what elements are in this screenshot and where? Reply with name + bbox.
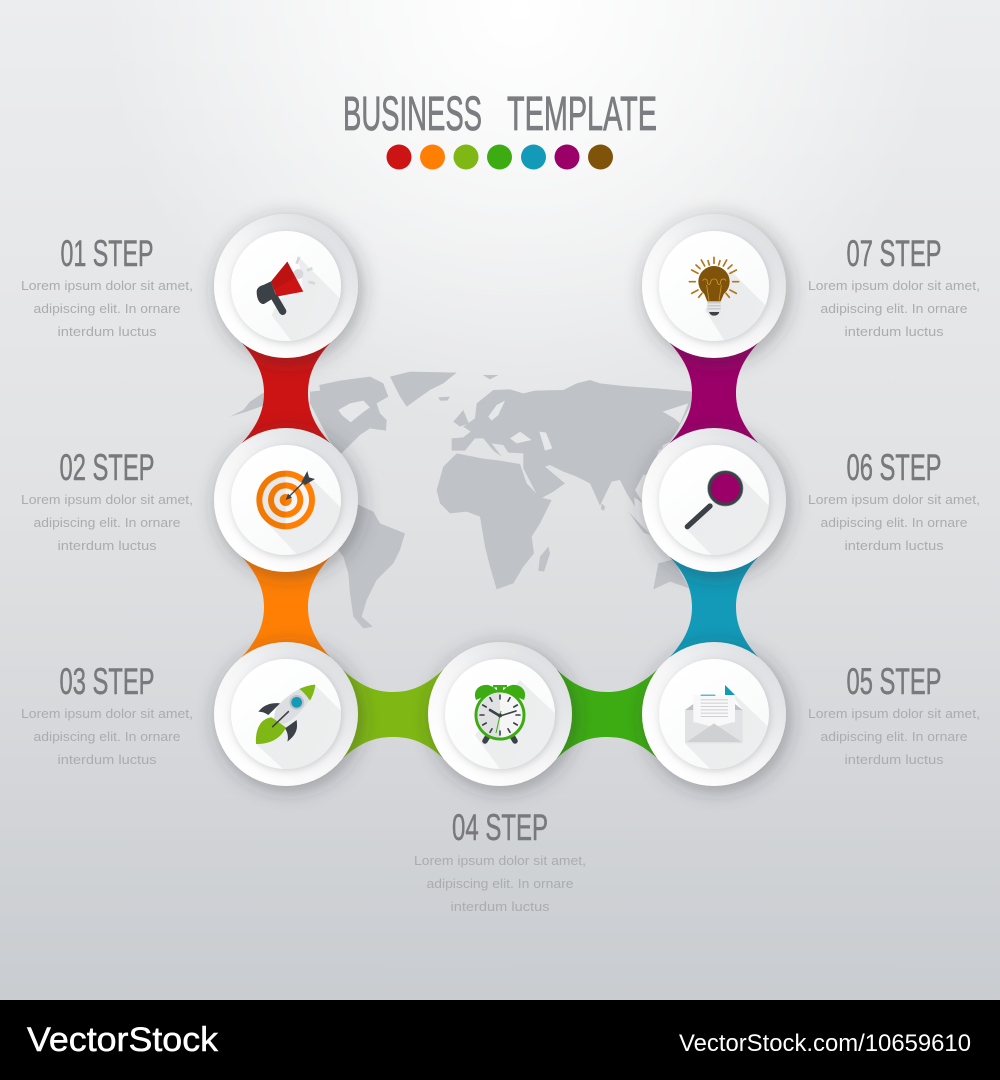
step 7 text: adipiscing elit. In ornare [820, 302, 968, 316]
footer bar [0, 1000, 1000, 1080]
step 6 text: adipiscing elit. In ornare [820, 516, 968, 530]
step 5 text: 05 STEP [846, 661, 942, 702]
step 7 text [808, 233, 980, 339]
step 2 text [21, 447, 193, 553]
step 1 text [21, 233, 193, 339]
step 1 text: 01 STEP [60, 233, 154, 274]
step 3 disc [214, 642, 358, 786]
step 3 text: Lorem ipsum dolor sit amet, [21, 707, 193, 721]
connector: purple [670, 286, 758, 500]
step 4 text: Lorem ipsum dolor sit amet, [414, 854, 586, 868]
step 2 disc [214, 428, 358, 572]
connector: teal [670, 500, 758, 714]
step 5 text: adipiscing elit. In ornare [820, 730, 968, 744]
step 7 text: Lorem ipsum dolor sit amet, [808, 279, 980, 293]
step 7 text: interdum luctus [844, 325, 944, 339]
step 6 text: Lorem ipsum dolor sit amet, [808, 493, 980, 507]
footer bar: VectorStock.com/10659610 [679, 1030, 971, 1057]
icon: light bulb [688, 256, 765, 340]
icon: magnifier [684, 470, 768, 555]
step 7 text: 07 STEP [846, 233, 942, 274]
title: BUSINESS [343, 88, 482, 141]
step 3 text: adipiscing elit. In ornare [34, 730, 181, 744]
step 3 text: interdum luctus [58, 753, 156, 767]
connector: light green [286, 670, 500, 758]
step 4 disc [428, 642, 572, 786]
colour dots legend [386, 144, 613, 170]
step 4 text [414, 807, 586, 914]
step 3 text [21, 661, 193, 767]
step 5 text: Lorem ipsum dolor sit amet, [808, 707, 980, 721]
step 4 text: 04 STEP [452, 807, 548, 848]
step 1 text: adipiscing elit. In ornare [34, 302, 181, 316]
icon: envelope [685, 685, 768, 769]
step 5 text [808, 661, 980, 767]
step 6 disc [642, 428, 786, 572]
step 1 text: interdum luctus [58, 325, 156, 339]
step 6 text: interdum luctus [844, 539, 944, 553]
connector: red [242, 286, 330, 500]
icon: rocket [256, 684, 341, 769]
step 2 text: Lorem ipsum dolor sit amet, [21, 493, 193, 507]
footer bar: VectorStock [27, 1021, 219, 1059]
icon: alarm clock [474, 680, 555, 769]
step 3 text: 03 STEP [60, 661, 154, 702]
step 5 text: interdum luctus [844, 753, 944, 767]
step 2 text: interdum luctus [58, 539, 156, 553]
step 5 disc [642, 642, 786, 786]
step 4 text: adipiscing elit. In ornare [426, 877, 574, 891]
step 1 disc [214, 214, 358, 358]
step 1 text: Lorem ipsum dolor sit amet, [21, 279, 193, 293]
step 6 text: 06 STEP [846, 447, 942, 488]
step 2 text: adipiscing elit. In ornare [34, 516, 181, 530]
icon: megaphone [256, 256, 340, 340]
icon: target [256, 470, 340, 554]
title: TEMPLATE [507, 88, 657, 141]
step 4 text: interdum luctus [450, 900, 550, 914]
connector: orange [242, 500, 330, 714]
world map [230, 372, 693, 628]
step 7 disc [642, 214, 786, 358]
connector: green [500, 670, 714, 758]
step 2 text: 02 STEP [60, 447, 154, 488]
step 6 text [808, 447, 980, 553]
